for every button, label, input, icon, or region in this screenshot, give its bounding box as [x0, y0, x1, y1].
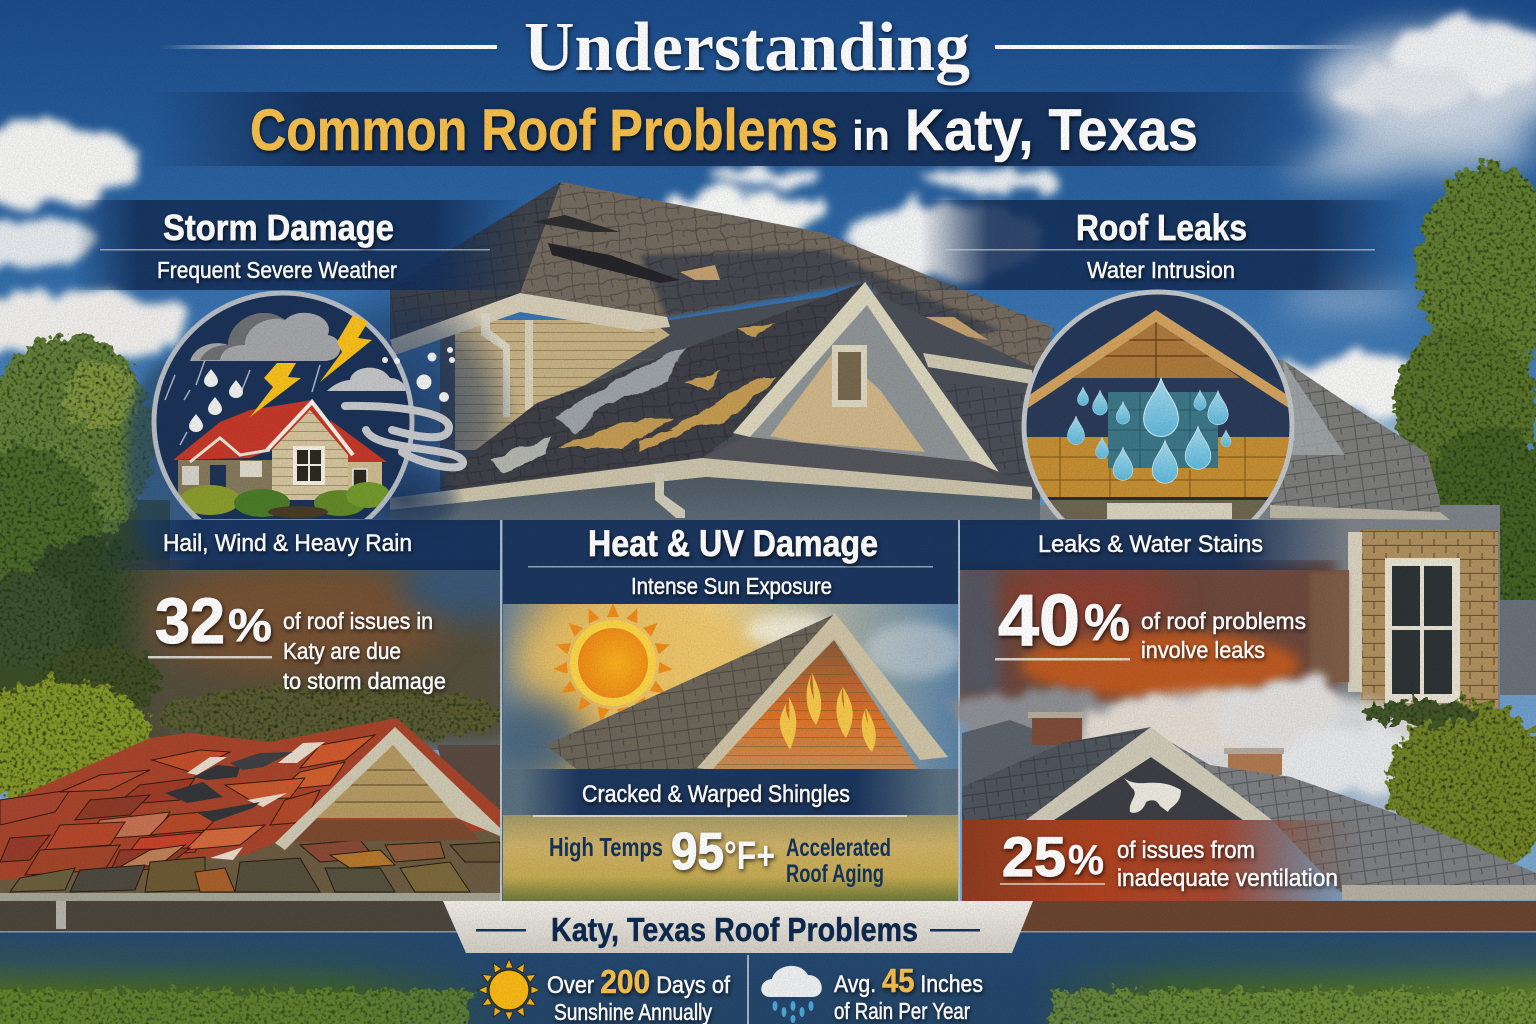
stat: rain inches: Avg. 45 Inches [834, 962, 983, 999]
banner: Katy Texas Roof Problems: Katy, Texas Roof Problems [551, 911, 918, 948]
stat: rain inches: of Rain Per Year [834, 998, 970, 1024]
icon: lightning bolts [250, 315, 372, 417]
icon: cloud shading [200, 313, 285, 360]
banner: Katy Texas Roof Problems [443, 901, 1033, 953]
heading band: storm damage [75, 200, 525, 290]
main house roof and gable [280, 182, 1536, 715]
title band [150, 92, 1320, 166]
bottom strip with stats [0, 901, 1536, 1024]
stat: high temps field: °F+ [724, 834, 775, 878]
heat illustration: sun on roof [485, 590, 965, 780]
icon: rain cloud [761, 966, 822, 1023]
title line two: Common Roof Problems [250, 98, 838, 163]
heading: Storm Damage [163, 207, 394, 248]
bush [0, 645, 160, 811]
title band: Katy, Texas [905, 98, 1198, 163]
stat: 32 percent: to storm damage [283, 668, 446, 694]
navy haze lower left of the eave [345, 465, 465, 535]
heading band: heat [503, 520, 958, 604]
roof and gable [546, 614, 835, 772]
icon: small cloud [327, 368, 410, 391]
band: cracked and warped shingles: Cracked & Warped Shingles [582, 781, 850, 808]
icon: water drops [1068, 378, 1231, 483]
title line one: Understanding [524, 9, 970, 86]
stat: 25 percent ventilation: 25 [1002, 825, 1066, 888]
heading band: roof leaks [920, 200, 1410, 290]
title block [150, 9, 1370, 166]
stat: 32 percent: % [228, 599, 272, 651]
right-side house wall with stone and window [1040, 505, 1536, 715]
stat: 40 percent [995, 581, 1306, 663]
navy rain haze [280, 280, 520, 560]
band: leaks and water stains [960, 520, 1350, 570]
multicolor lower shingles [10, 840, 500, 892]
right stats backdrop [955, 560, 1335, 710]
title band: in [852, 112, 890, 159]
stat: 40 percent: % [1084, 594, 1130, 652]
icon: rain cloud [190, 313, 340, 361]
house backing fill [440, 290, 1040, 520]
stat: 40 percent: involve leaks [1141, 637, 1265, 663]
stat: 25 percent ventilation: of issues from [1117, 837, 1255, 864]
stat: 40 percent: of roof problems [1141, 608, 1306, 634]
stat: 32 percent: 32 [155, 585, 225, 657]
panel: left column [0, 200, 540, 932]
band: hail, wind and heavy rain [95, 520, 501, 570]
stat: sunshine days: Over 200 Days of [547, 963, 730, 1000]
icon: hailstones [189, 347, 455, 432]
band: cracked and warped shingles [503, 769, 958, 815]
stat: 25 percent ventilation: % [1068, 836, 1104, 883]
house illustration [173, 400, 390, 518]
bushes [180, 482, 390, 518]
icon: wind swirls [345, 406, 463, 467]
icon: sun [553, 603, 673, 723]
stat: 25 percent ventilation: inadequate ventilation [1117, 865, 1338, 892]
right bush [1360, 700, 1536, 880]
stat: 32 percent [148, 585, 446, 694]
icon: white vent shape [1124, 778, 1181, 813]
band: leaks and water stains: Leaks & Water Stains [1038, 531, 1263, 558]
icon: heat flames [780, 673, 876, 752]
red shingles [0, 735, 375, 875]
stat: 32 percent: of roof issues in [283, 608, 433, 634]
stat: 40 percent: 40 [998, 581, 1080, 661]
icon: sun [478, 959, 540, 1021]
stat: high temps field: 95 [671, 823, 724, 881]
stat: high temps field: Accelerated [786, 834, 891, 862]
icon: storm circle with house, lightning, hail, wind [154, 293, 463, 551]
panel: right column [920, 200, 1536, 932]
heading: Roof Leaks [1076, 207, 1247, 248]
roof tears [532, 215, 988, 340]
red damaged roof illustration [0, 718, 502, 932]
subheading: Frequent Severe Weather [157, 257, 397, 283]
lower roof illustration [962, 712, 1536, 892]
stat: 25 percent ventilation [962, 820, 1362, 902]
smoke-like clouds [950, 676, 1450, 821]
damaged shingles [165, 742, 325, 860]
icon: roof leak circle [1020, 292, 1300, 560]
subheading: Intense Sun Exposure [631, 573, 832, 599]
band: hail, wind and heavy rain: Hail, Wind & Heavy Rain [163, 530, 412, 557]
title rules [160, 45, 1370, 49]
stat: high temps field: High Temps [549, 832, 663, 862]
heading: Heat & UV Damage [588, 523, 878, 564]
stat: rain inches [834, 962, 983, 1024]
trees left and right [0, 165, 1536, 770]
subheading: Water Intrusion [1087, 257, 1235, 283]
stat: sunshine days [547, 963, 730, 1024]
stat: high temps field: Roof Aging [786, 860, 884, 888]
brick wall beside the panel [1310, 572, 1348, 682]
left stats backdrop [122, 560, 501, 750]
stat: high temps field [503, 815, 958, 903]
stat: 32 percent: Katy are due [283, 638, 401, 664]
panel: heat and UV damage [485, 520, 965, 905]
